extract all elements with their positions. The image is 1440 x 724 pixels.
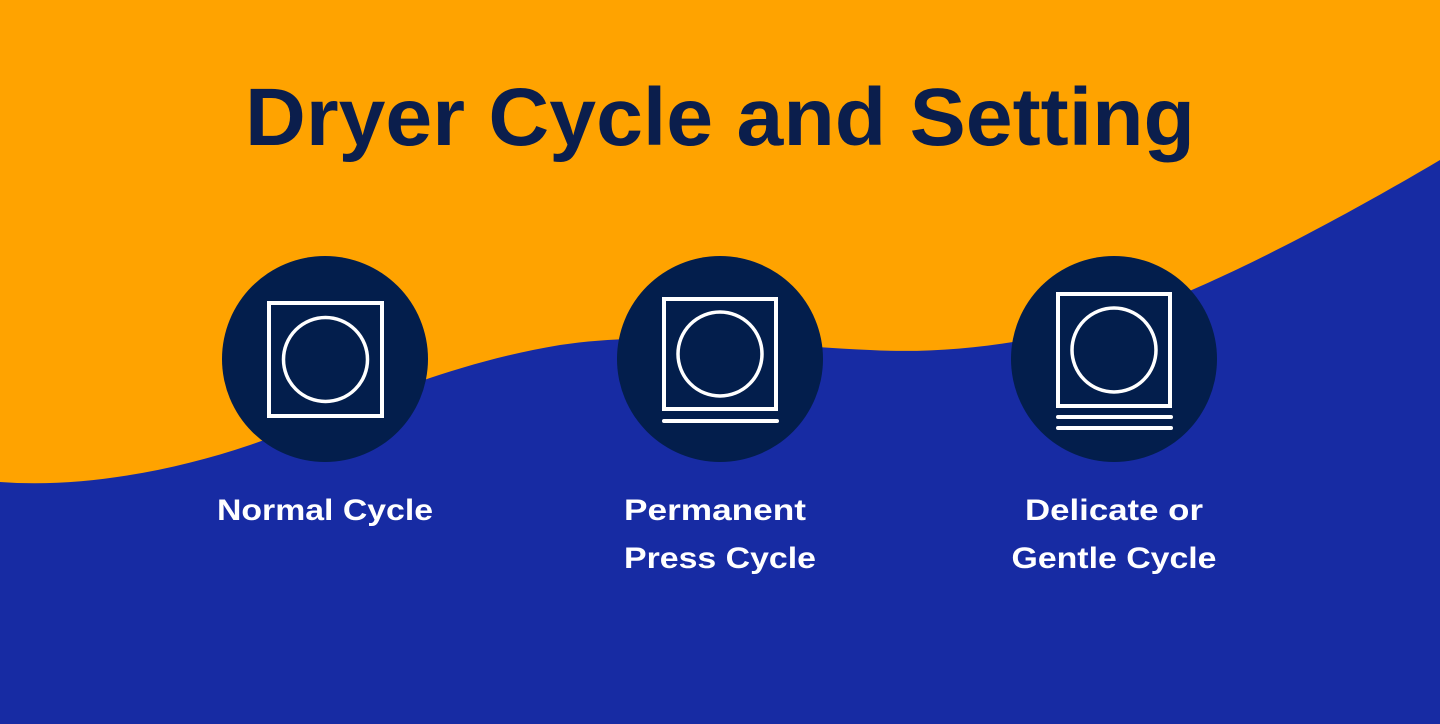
icon: permanent press bbox=[617, 256, 823, 462]
title: Dryer Cycle and Setting bbox=[245, 72, 1195, 163]
label: permanent press: Permanent bbox=[624, 494, 806, 527]
label: delicate bbox=[1012, 494, 1216, 575]
label: delicate: Gentle Cycle bbox=[1012, 542, 1216, 575]
label: delicate: Delicate or bbox=[1025, 494, 1203, 527]
label: permanent press: Press Cycle bbox=[624, 542, 816, 575]
icon: delicate bbox=[1011, 256, 1217, 462]
icon: normal cycle bbox=[222, 256, 428, 462]
background orange wave bbox=[0, 0, 1440, 483]
label: normal cycle: Normal Cycle bbox=[217, 494, 433, 527]
label: permanent press bbox=[624, 494, 816, 575]
